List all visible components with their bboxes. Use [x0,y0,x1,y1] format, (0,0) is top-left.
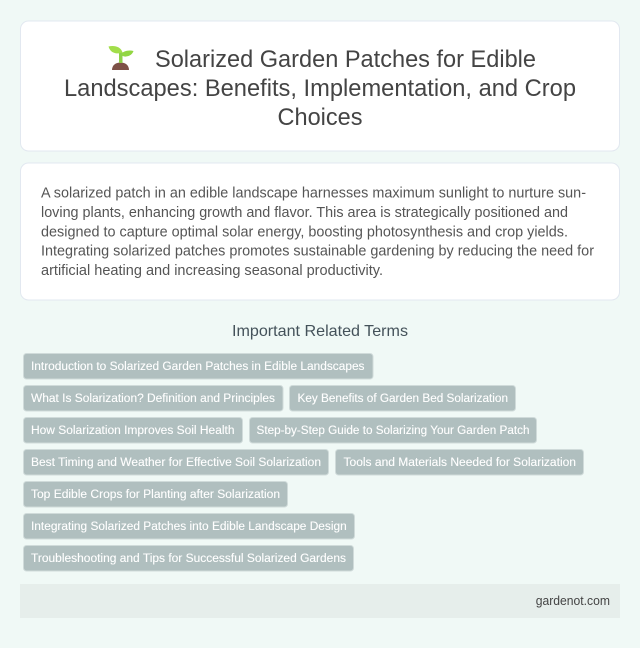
tag: Integrating Solarized Patches into Edible Landscape Design [31,519,347,533]
title: Choices [278,104,362,131]
icon: seedling [108,46,134,70]
tag [24,514,354,539]
tag [24,546,354,571]
panel: title card [20,21,620,151]
tag: Tools and Materials Needed for Solarization [344,455,576,469]
tag list [24,354,584,571]
description text: artificial heating and increasing seasonal productivity. [41,263,383,279]
heading: related terms: Important Related Terms [232,323,408,340]
footer site name: gardenot.com [536,593,610,608]
footer [20,584,620,618]
tag [290,386,516,411]
tag [336,450,584,475]
description text: A solarized patch in an edible landscape harnesses maximum sunlight to nurture sun- [41,185,586,201]
description text [41,185,594,279]
tag [24,418,242,443]
title: Solarized Garden Patches for Edible [155,46,536,73]
tag [250,418,536,443]
tag: How Solarization Improves Soil Health [31,423,234,437]
tag: Step-by-Step Guide to Solarizing Your Garden Patch [256,423,530,437]
tag: Best Timing and Weather for Effective Soil Solarization [31,455,321,469]
tag: Troubleshooting and Tips for Successful Solarized Gardens [31,551,346,565]
panel: description [20,163,620,300]
tag: What Is Solarization? Definition and Principles [31,391,275,405]
tag: Key Benefits of Garden Bed Solarization [298,391,508,405]
tag: Top Edible Crops for Planting after Solarization [31,487,280,501]
tag [24,450,328,475]
tag: Introduction to Solarized Garden Patches in Edible Landscapes [31,359,364,373]
description text: loving plants, enhancing growth and flavor. This area is strategically positioned and [41,205,568,221]
title [64,46,576,131]
tag [24,354,373,379]
tag [24,386,283,411]
description text: Integrating solarized patches promotes sustainable gardening by reducing the need for [41,244,594,260]
tag [24,482,288,507]
description text: designed to capture optimal solar energy, boosting photosynthesis and crop yields. [41,224,568,240]
title: Landscapes: Benefits, Implementation, and Crop [64,75,576,102]
